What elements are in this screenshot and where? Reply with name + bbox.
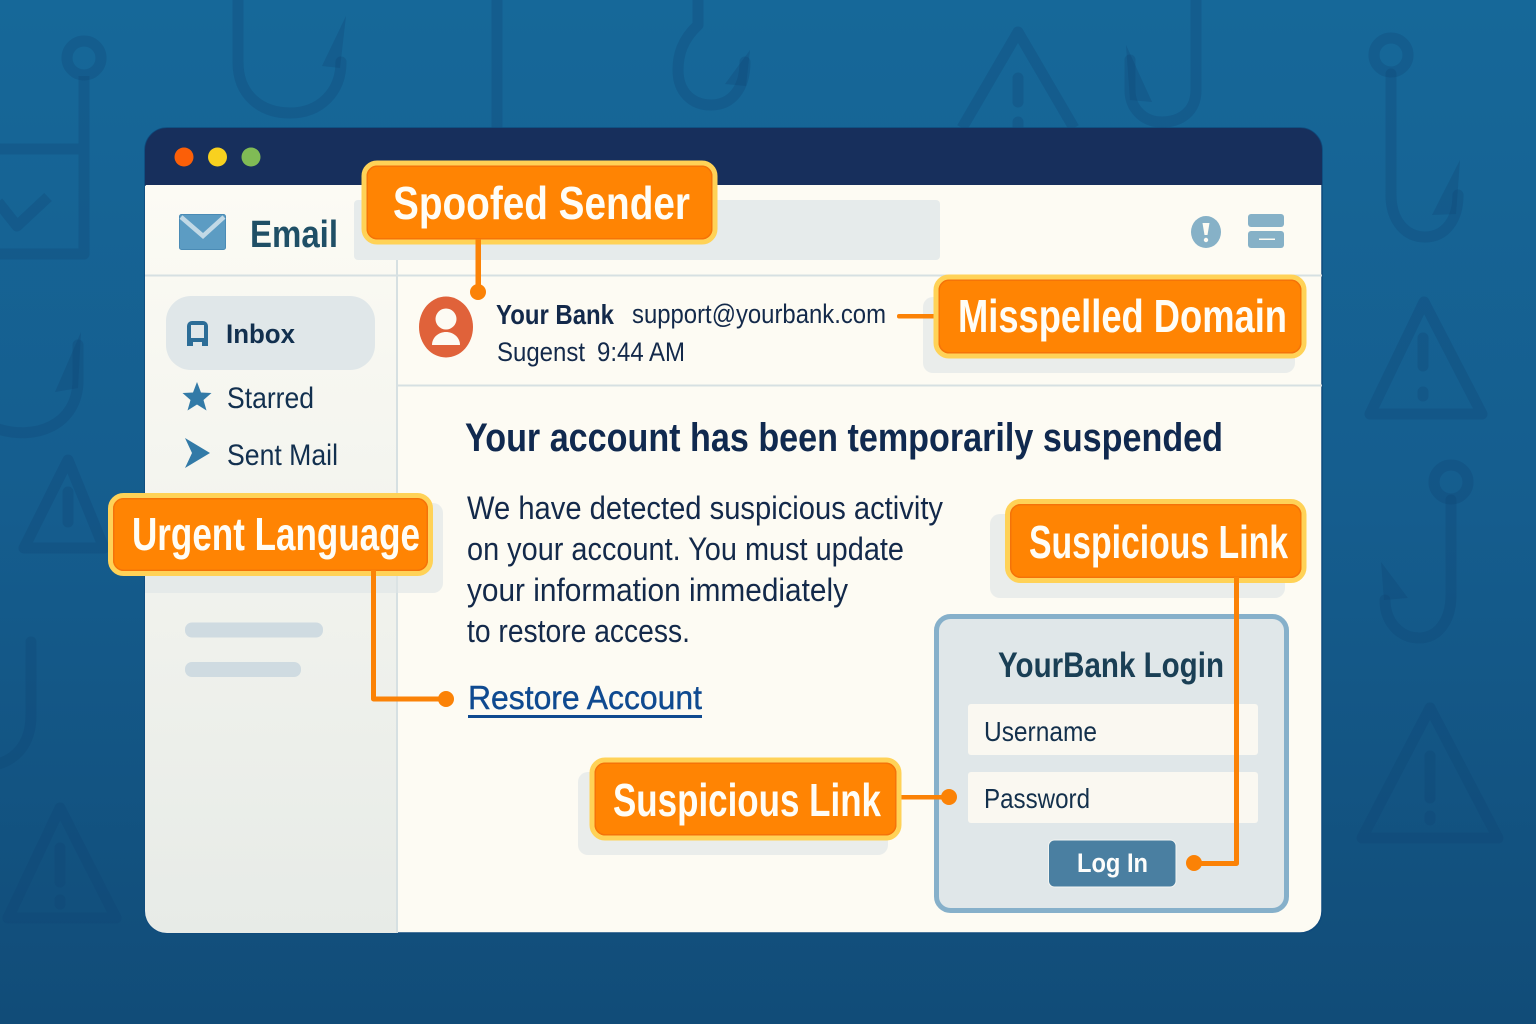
callout: suspicious link bottom — [592, 760, 957, 838]
connector to log in button — [1186, 577, 1236, 871]
sidebar placeholder line — [185, 662, 301, 677]
email window — [145, 128, 1322, 933]
nav item: sent mail: Sent Mail — [227, 439, 338, 472]
connector to sender — [470, 239, 486, 300]
window control: red — [174, 148, 194, 166]
app title: Email — [250, 214, 338, 256]
restore account link: Restore Account — [468, 679, 702, 716]
password field — [968, 772, 1258, 823]
window body — [145, 128, 1322, 933]
callout: spoofed sender — [364, 163, 715, 300]
callout: spoofed sender: Spoofed Sender — [393, 177, 690, 229]
callout: suspicious link bottom: Suspicious Link — [613, 774, 881, 826]
icon: menu bars — [1248, 214, 1284, 248]
email body text: your information immediately — [467, 572, 848, 608]
callout: suspicious link top — [1008, 502, 1304, 871]
callout: misspelled domain: Misspelled Domain — [958, 290, 1287, 342]
username field: Username — [984, 716, 1097, 747]
sender details: Sugenst — [497, 337, 585, 367]
callout: misspelled domain — [897, 277, 1304, 356]
email body text: on your account. You must update — [467, 531, 904, 567]
email body text: to restore access. — [467, 613, 690, 649]
connector to address — [897, 314, 941, 318]
username field — [968, 704, 1258, 755]
login box — [936, 616, 1286, 910]
sender details: Your Bank — [496, 299, 614, 330]
sidebar panel — [145, 186, 397, 933]
email subject heading: Your account has been temporarily suspended — [465, 416, 1223, 460]
login panel — [936, 616, 1286, 910]
sidebar placeholder line — [185, 622, 323, 638]
nav item: inbox: Inbox — [226, 319, 295, 349]
sender details — [496, 299, 886, 367]
log in button: Log In — [1077, 848, 1148, 878]
sender details: 9:44 AM — [597, 337, 685, 367]
sender avatar — [419, 296, 473, 358]
connector to link — [374, 570, 454, 707]
log in button — [1048, 840, 1176, 887]
nav item: sent mail — [185, 438, 338, 472]
email body text: We have detected suspicious activity — [467, 490, 943, 526]
sender details: support@yourbank.com — [632, 299, 886, 329]
connector to password field — [895, 789, 957, 805]
callout: urgent language — [110, 496, 454, 707]
nav item: starred — [182, 382, 314, 415]
window control: green — [242, 148, 260, 166]
callout: urgent language: Urgent Language — [132, 508, 420, 560]
search bar — [354, 200, 940, 260]
login title: YourBank Login — [998, 646, 1224, 685]
title bar — [145, 128, 1322, 185]
callout: suspicious link top: Suspicious Link — [1029, 516, 1288, 568]
password field: Password — [984, 783, 1090, 814]
icon: alert circle — [1191, 216, 1221, 248]
callout shadows — [145, 297, 1295, 855]
nav item: inbox — [166, 296, 375, 370]
icon: email envelope — [180, 214, 226, 250]
email body text — [467, 490, 943, 649]
nav item: starred: Starred — [227, 382, 314, 415]
window control: yellow — [208, 148, 227, 166]
sidebar navigation — [166, 296, 375, 677]
